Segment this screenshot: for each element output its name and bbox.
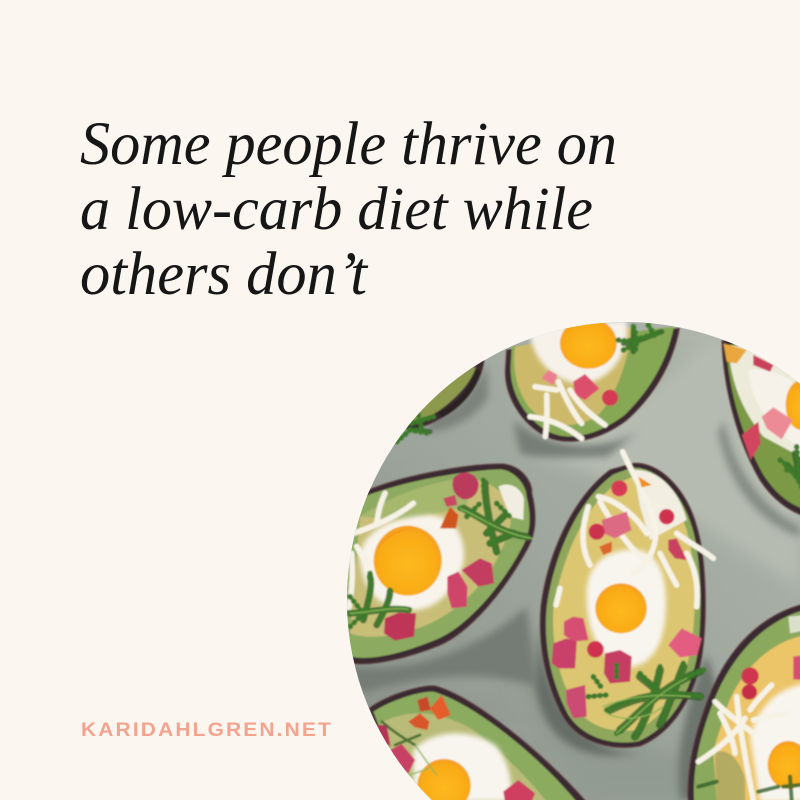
photo: stuffed avocados in a circle — [340, 318, 800, 800]
title: a low-carb diet while — [80, 176, 593, 243]
marble surface — [340, 320, 800, 800]
avocado: centre — [540, 452, 713, 747]
avocado: bottom right, cropped — [688, 603, 800, 800]
title: others don’t — [80, 241, 369, 308]
title — [80, 111, 617, 308]
footer website url: KARIDAHLGREN.NET — [81, 719, 333, 741]
title: Some people thrive on — [80, 111, 617, 178]
avocado: bottom left, cropped — [369, 686, 586, 800]
avocado: left — [340, 464, 535, 664]
avocado: top centre — [505, 318, 679, 441]
avocado: top left, cropped — [373, 353, 484, 442]
avocado: top right, cropped — [722, 340, 800, 517]
